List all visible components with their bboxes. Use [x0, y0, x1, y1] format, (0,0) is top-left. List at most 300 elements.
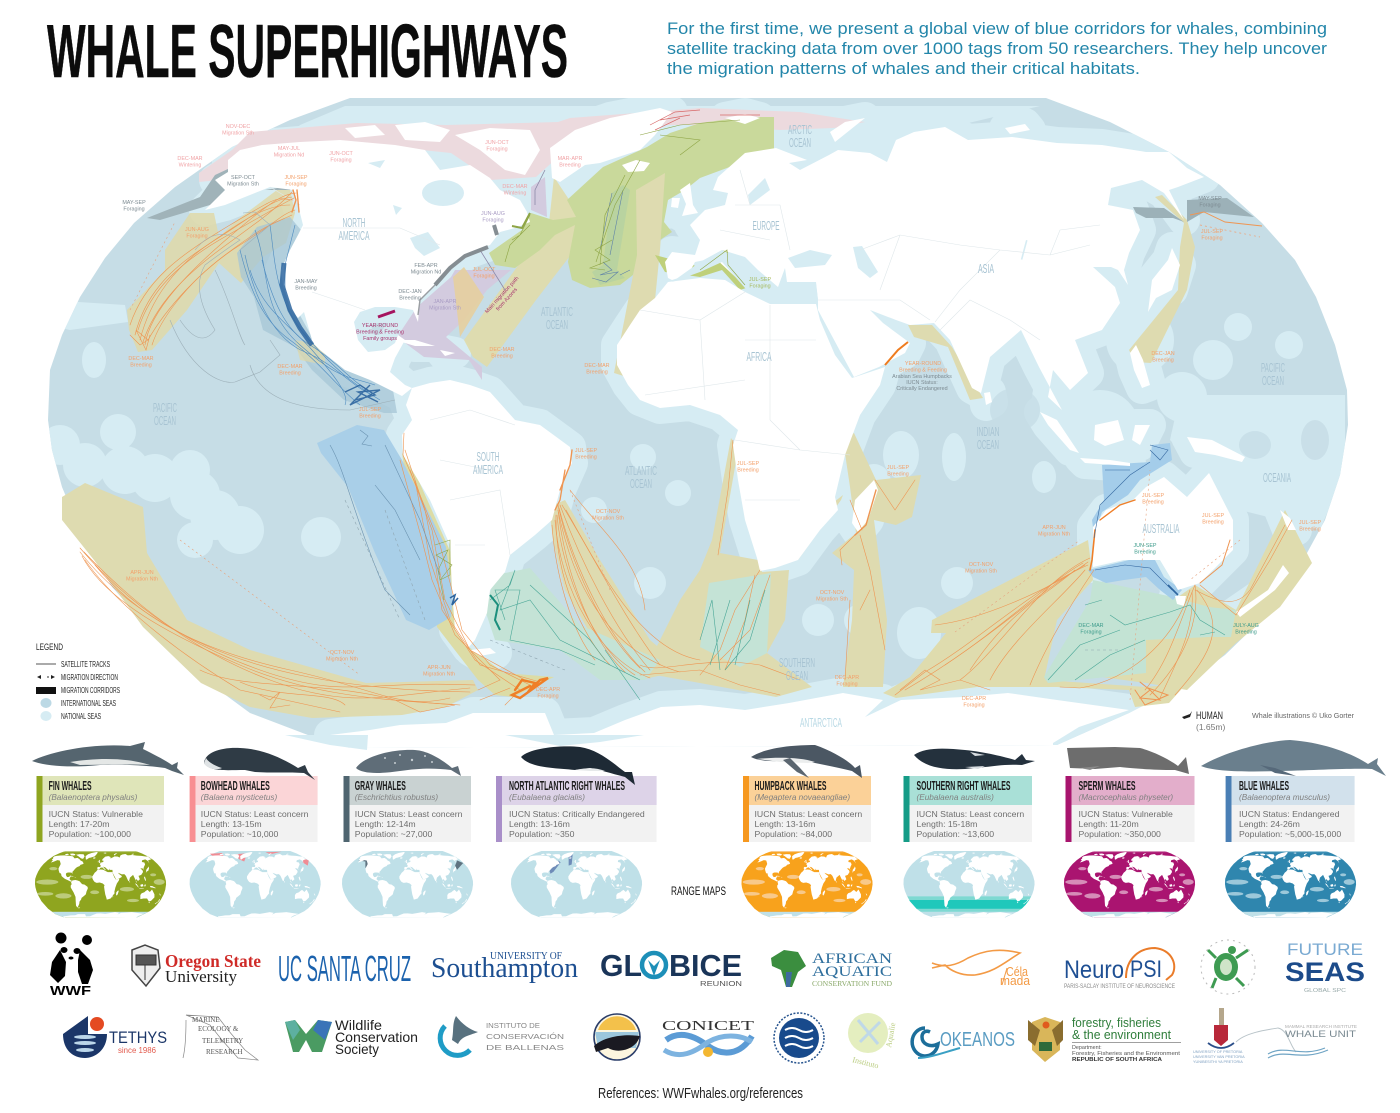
world map [40, 98, 1348, 765]
logo: NeuroPSI: Neuro [1064, 956, 1124, 984]
range map: bowhead [190, 851, 321, 920]
blue track cluster off Chile and Australia [450, 585, 1178, 605]
logo: Cetamada: Céla [1006, 964, 1029, 979]
logo: Tethys [63, 1016, 167, 1058]
logo: Marine Ecology and Telemetry Research: ECOLOGY & [198, 1025, 239, 1033]
geographic labels: AMERICA [338, 228, 370, 243]
logo: Forestry Fisheries and the Environment: REPUBLIC OF SOUTH AFRICA [1072, 1057, 1162, 1063]
species card: gray whales: Population: ~27,000 [355, 829, 432, 839]
seasonal labels: Migration Nth [126, 576, 158, 582]
species card: fin whales: FIN WHALES [49, 778, 92, 793]
seasonal labels: JUN-AUG [481, 211, 505, 217]
seasonal labels: JUN-AUG [185, 227, 209, 233]
seasonal labels: MAY-SEP [122, 200, 146, 206]
species card: sperm whales [1066, 776, 1194, 842]
whale: humpback [751, 745, 862, 778]
species card: fin whales: Length: 17-20m [49, 819, 109, 829]
species card: north atlantic right whales: IUCN Status: Critically Endangered [509, 809, 645, 819]
logo: Tethys: TETHYS [109, 1028, 167, 1047]
seasonal labels [122, 124, 1321, 708]
geographic labels: ASIA [978, 261, 994, 276]
legend: migration corridors: MIGRATION CORRIDORS [61, 686, 120, 695]
geographic labels: NORTH [342, 215, 366, 230]
seasonal labels: MAY-JUL [278, 146, 300, 152]
seasonal labels: Breeding & Feeding [899, 368, 947, 374]
whale: bowhead [204, 748, 315, 780]
logo: Wildlife Conservation Society: Society [335, 1041, 379, 1057]
logo: University of Pretoria: UNIVERSITY VAN PRETORIA [1193, 1055, 1245, 1059]
seasonal labels: OCT-NOV [969, 562, 993, 568]
whale: blue [1201, 740, 1386, 776]
seasonal labels: Foraging [963, 702, 985, 708]
migration corridors [62, 108, 1312, 718]
seasonal labels: Foraging [482, 218, 504, 224]
species card: blue whales: IUCN Status: Endangered [1239, 809, 1340, 819]
seasonal labels: APR-JUN [427, 665, 451, 671]
logo: Cetamada [932, 950, 1031, 988]
seasonal labels: JUL-SEP [359, 407, 381, 413]
legend: satellite tracks: SATELLITE TRACKS [61, 660, 110, 669]
logo: Marine Ecology and Telemetry Research: RESEARCH [206, 1048, 243, 1056]
corridor: South Pacific [62, 483, 478, 718]
seasonal labels: DEC-MAR [1078, 623, 1104, 629]
geographic labels: AUSTRALIA [1142, 521, 1180, 536]
corridor: southern right whales Atlantic [485, 568, 771, 680]
human scale: HUMAN [1196, 710, 1223, 722]
logo: Cetamada: mada [1000, 973, 1031, 988]
seasonal labels: JUL-SEP [737, 461, 759, 467]
range map: gray [342, 851, 473, 920]
human scale: (1.65m) [1196, 722, 1225, 732]
legend: LEGEND [36, 642, 63, 653]
species card: southern right whales: Length: 15-18m [916, 819, 977, 829]
geographic labels: OCEAN [1262, 373, 1284, 388]
dense blue track cluster off Central America [345, 385, 380, 405]
species card: gray whales: (Eschrichtius robustus) [355, 793, 438, 802]
seasonal labels: Migration Sth [429, 306, 461, 312]
seasonal labels: Foraging [836, 682, 858, 688]
national seas [40, 106, 1345, 765]
logo: Tethys: since 1986 [118, 1046, 157, 1055]
logo: Environment Society of Oman turtle [1201, 940, 1255, 994]
seasonal labels: NOV-DEC [226, 124, 250, 130]
logo: Oregon State University: Oregon State [165, 951, 261, 971]
geographic labels: SOUTH [476, 449, 500, 464]
corridor: Arabian Sea [908, 325, 983, 400]
logo: University of Pretoria [1193, 1008, 1245, 1064]
seasonal labels: Wintering [504, 190, 526, 196]
seasonal labels: Foraging [1201, 236, 1223, 242]
corridor: E Atlantic [614, 173, 665, 378]
species card: humpback whales: (Megaptera novaeangliae) [754, 793, 850, 802]
seasonal labels: Wintering [179, 162, 201, 168]
seasonal labels: JUL-SEP [1142, 493, 1164, 499]
seasonal labels: APR-JUN [130, 570, 154, 576]
corridor: NW Atlantic humpback [464, 177, 580, 367]
corridor: fin whale core band [592, 185, 630, 285]
logo: NeuroPSI: PARIS-SACLAY INSTITUTE OF NEUROSCIENCE [1064, 984, 1175, 990]
land masses [205, 108, 1296, 765]
seasonal labels: Foraging [1080, 630, 1102, 636]
seasonal labels: JAN-MAY [294, 279, 318, 285]
seasonal labels: JUN-SEP [284, 175, 308, 181]
whale: fin [32, 742, 184, 775]
logo: Wildlife Conservation Society: Wildlife [335, 1017, 382, 1033]
seasonal labels: Breeding [1152, 358, 1174, 364]
species card: blue whales: Length: 24-26m [1239, 819, 1300, 829]
corridor: SE Pacific blue whales [317, 425, 453, 630]
seasonal labels: JUL-SEP [749, 277, 771, 283]
logo: African Aquatic Conservation Fund: CONSERVATION FUND [812, 980, 892, 988]
logo: Instituto de Conservacion de Ballenas: CONSERVACIÓN [486, 1032, 564, 1041]
seasonal labels: Migration Nth [423, 672, 455, 678]
text: UC SANTA CRUZ [278, 948, 411, 989]
whale: southern right [914, 749, 1035, 769]
species card: north atlantic right whales: Population: ~350 [509, 829, 575, 839]
logo: Oregon State University: University [165, 967, 237, 986]
species card: southern right whales [904, 776, 1032, 842]
geographic labels: AFRICA [746, 349, 772, 364]
species card: sperm whales: (Macrocephalus physeter) [1078, 793, 1173, 802]
seasonal labels: DEC-MAR [277, 364, 303, 370]
logo: southern right whale round badge [594, 1014, 640, 1060]
seasonal labels: Breeding [1142, 500, 1164, 506]
seasonal labels: JUL-OCT [473, 267, 495, 273]
species card: southern right whales: IUCN Status: Least concern [916, 809, 1024, 819]
seasonal labels: DEC-MAR [584, 363, 610, 369]
geographic labels: AMERICA [473, 462, 503, 477]
corridor: bowhead [199, 108, 865, 182]
corridor: Mexico tail [295, 340, 325, 365]
logo: Instituto de Conservacion de Ballenas: DE BALLENAS [486, 1043, 564, 1052]
ocean base [48, 98, 1348, 748]
whale: sperm [1067, 747, 1189, 774]
logo: Forestry Fisheries and the Environment: forestry, fisheries [1072, 1015, 1161, 1030]
seasonal labels: JUL-SEP [887, 465, 909, 471]
seasonal labels: Foraging [473, 274, 495, 280]
tracks: other species [130, 110, 1262, 700]
world map: OCEANIA [1263, 470, 1291, 485]
seasonal labels: YEAR-ROUND [362, 323, 398, 329]
corridor: Pacific gray whales [237, 217, 397, 413]
geographic labels: OCEAN [977, 437, 999, 452]
seasonal labels: from Azores [495, 287, 519, 312]
seasonal labels: Migration Nd [411, 270, 441, 276]
corridor: Madagascar [798, 433, 921, 687]
species card: blue whales: BLUE WHALES [1239, 778, 1289, 793]
logo: Instituto de Conservacion de Ballenas [440, 1016, 564, 1055]
species card: north atlantic right whales: (Eubalaena glacialis) [509, 793, 585, 802]
species card: sperm whales: Length: 11-20m [1078, 819, 1139, 829]
species card: north atlantic right whales: NORTH ATLANTIC RIGHT WHALES [509, 778, 625, 793]
seasonal labels: Breeding [1202, 520, 1224, 526]
logo: Okeanos: OKEANOS [940, 1029, 1015, 1051]
sea fragments below Antarctica [285, 735, 644, 750]
logo: Instituto Aqualie [848, 1013, 897, 1070]
seasonal labels: Main migration path [484, 276, 520, 315]
seasonal labels: Migration Sth [816, 596, 848, 602]
seasonal labels: JAN-APR [433, 299, 457, 305]
logo: Globice [600, 948, 742, 988]
species card: bowhead whales: Length: 13-15m [201, 819, 262, 829]
legend: national seas: NATIONAL SEAS [61, 712, 101, 721]
legend [36, 642, 120, 721]
seasonal labels: DEC-APR [962, 696, 986, 702]
logo: University of Pretoria: UNIVERSITY OF PRETORIA [1193, 1050, 1243, 1054]
seasonal labels: Breeding [491, 354, 513, 360]
logo: Marine Ecology and Telemetry Research: TELEMETRY [202, 1037, 243, 1045]
seasonal labels: DEC-MAR [177, 156, 203, 162]
seasonal labels: Breeding [295, 286, 317, 292]
species card: gray whales: GRAY WHALES [355, 778, 406, 793]
species card: bowhead whales [190, 776, 318, 842]
tracks: gray whales in Pacific [170, 212, 395, 410]
corridor: SE Australia [1041, 510, 1312, 690]
species card: sperm whales: Population: ~350,000 [1078, 829, 1161, 839]
logo: African Aquatic Conservation Fund: AQUATIC [812, 964, 892, 980]
seasonal labels: Foraging [1199, 202, 1221, 208]
seasonal labels: JUL-SEP [575, 448, 597, 454]
species card: bowhead whales: Population: ~10,000 [201, 829, 278, 839]
human scale [1182, 710, 1225, 732]
legend: international seas: INTERNATIONAL SEAS [61, 699, 116, 708]
seasonal labels: YEAR-ROUND [905, 361, 941, 367]
logo: Future Seas [1285, 940, 1365, 994]
geographic labels: EUROPE [752, 218, 780, 233]
seasonal labels: DEC-APR [536, 687, 560, 693]
logo: Future Seas: GLOBAL SPC [1304, 988, 1346, 994]
corridor: South Atlantic [650, 438, 812, 697]
logo: African Aquatic Conservation Fund: AFRICAN [812, 951, 892, 967]
corridor: Australia blue whales [1088, 443, 1182, 600]
seasonal labels: JUN-OCT [485, 140, 509, 146]
intro text: the migration patterns of whales and their critical habitats. [667, 59, 1140, 78]
seasonal labels: Breeding & Feeding [356, 330, 404, 336]
seasonal labels: DEC-APR [835, 675, 859, 681]
seasonal labels: IUCN Status: [906, 380, 938, 386]
logo: African Aquatic Conservation Fund [771, 950, 892, 988]
satellite tracks: humpback [80, 190, 1292, 712]
range map: sperm [1063, 851, 1196, 920]
logo: Conicet: CONICET [662, 1019, 755, 1034]
logo: Escuela Superior de Ciencias Marinas [774, 1013, 824, 1063]
species card: humpback whales: Population: ~84,000 [754, 829, 832, 839]
logo: Forestry Fisheries and the Environment: Forestry, Fisheries and the Environment [1072, 1051, 1181, 1057]
range map: humpback [741, 851, 874, 920]
logo: Instituto Aqualie: Instituto [852, 1055, 880, 1070]
species card: gray whales: Length: 12-14m [355, 819, 416, 829]
seasonal labels: Breeding [737, 468, 759, 474]
legend: migration direction: MIGRATION DIRECTION [61, 673, 118, 682]
corridor: N Atlantic right whale [397, 270, 511, 380]
seasonal labels: Migration Sth [222, 130, 254, 136]
range maps label: RANGE MAPS [671, 884, 726, 898]
species card: bowhead whales: BOWHEAD WHALES [201, 778, 270, 793]
country borders [270, 170, 1100, 555]
seasonal labels: JUL-SEP [1201, 229, 1223, 235]
logo: Forestry Fisheries and the Environment: Department: [1072, 1045, 1102, 1051]
corridor: Brazil humpback [549, 500, 685, 680]
species card: humpback whales [743, 776, 871, 842]
corridor: Alaska gray whales [147, 155, 295, 220]
illustration credit: Whale illustrations © Uko Gorter [1252, 711, 1355, 720]
logo: Wildlife Conservation Society: Conservation [335, 1029, 418, 1045]
seasonal labels: Breeding [559, 162, 581, 168]
seasonal labels: Breeding [130, 362, 152, 368]
seasonal labels: MAY-SEP [1198, 196, 1222, 202]
logo: Wildlife Conservation Society [285, 1017, 418, 1057]
range map: fin [34, 851, 167, 920]
geographic labels: SOUTHERN [779, 655, 815, 670]
logo: Instituto de Conservacion de Ballenas: INSTITUTO DE [486, 1021, 540, 1030]
seasonal labels: Critically Endangered [896, 386, 948, 392]
logo: Globice: BICE [669, 948, 742, 983]
seasonal labels: Breeding [399, 296, 421, 302]
seasonal labels: Migration Sth [227, 182, 259, 188]
intro text: satellite tracking data from over 1000 tags from 50 researchers. They help uncover [667, 39, 1327, 58]
species card: bowhead whales: (Balaena mysticetus) [201, 793, 278, 802]
seasonal labels: Breeding [586, 370, 608, 376]
tracks: blue whales [240, 190, 1172, 615]
species card: blue whales [1226, 776, 1355, 842]
seasonal labels: Breeding [1235, 630, 1257, 636]
seasonal labels: Breeding [887, 472, 909, 478]
logo: Instituto Aqualie: Aqualie [884, 1021, 897, 1048]
species card: fin whales: (Balaenoptera physalus) [49, 793, 138, 802]
seasonal labels: OCT-NOV [820, 590, 844, 596]
logo: WWF [50, 932, 93, 998]
seasonal labels: Foraging [486, 146, 508, 152]
seasonal labels: Foraging [186, 234, 208, 240]
species card: bowhead whales: IUCN Status: Least concern [201, 809, 309, 819]
corridor: Okhotsk gray whales [1133, 198, 1254, 222]
title: WHALE SUPERHIGHWAYS [47, 9, 568, 93]
intro text [667, 19, 1327, 78]
seasonal labels: Breeding [1134, 550, 1156, 556]
corridor: Asia [1129, 195, 1195, 363]
seasonal labels: Breeding [279, 370, 301, 376]
dense blue track strip on Pacific coast [282, 263, 312, 345]
logo: University of Pretoria: YUNIBESITHI YA PRETORIA [1193, 1060, 1243, 1064]
species card: fin whales: Population: ~100,000 [49, 829, 131, 839]
seasonal labels: Migration Sth [592, 516, 624, 522]
logo: Whale Unit [1236, 1024, 1357, 1058]
seasonal labels: JULY-AUG [1233, 623, 1259, 629]
logo: Globice: REUNION [700, 981, 742, 988]
geographic labels [153, 122, 1291, 730]
species card: blue whales: Population: ~5,000-15,000 [1239, 829, 1341, 839]
geographic labels: PACIFIC [1261, 360, 1285, 375]
seasonal labels: Foraging [330, 158, 352, 164]
seasonal labels: OCT-NOV [330, 650, 354, 656]
geographic labels: OCEAN [630, 476, 652, 491]
geographic labels: ATLANTIC [541, 304, 573, 319]
geographic labels: OCEAN [154, 413, 176, 428]
logo: Forestry Fisheries and the Environment: & the environment [1072, 1027, 1171, 1042]
species card: gray whales: IUCN Status: Least concern [355, 809, 463, 819]
seasonal labels: OCT-NOV [596, 509, 620, 515]
seasonal labels: JUN-OCT [329, 151, 353, 157]
seasonal labels: Breeding [575, 454, 597, 460]
seasonal labels: DEC-MAR [502, 184, 528, 190]
seasonal labels: Arabian Sea Humpbacks [892, 374, 952, 380]
species card: sperm whales: IUCN Status: Vulnerable [1078, 809, 1173, 819]
logo: University of Southampton: UNIVERSITY OF [490, 951, 562, 962]
geographic labels: ARCTIC [788, 122, 812, 137]
corridor: southern right whales Indian [1044, 580, 1236, 683]
species card: humpback whales: IUCN Status: Least concern [754, 809, 862, 819]
logo: Whale Unit: WHALE UNIT [1285, 1029, 1357, 1039]
seasonal labels: Migration Nth [326, 656, 358, 662]
species card: fin whales [36, 776, 164, 842]
whale: north atlantic right [521, 746, 635, 785]
seasonal labels: Foraging [123, 206, 145, 212]
species card: blue whales: (Balaenoptera musculus) [1239, 793, 1330, 802]
species card: sperm whales: SPERM WHALES [1078, 778, 1136, 793]
logo: University of Southampton: Southampton [431, 953, 578, 984]
corridor: N Pacific humpback [127, 190, 295, 352]
seasonal labels: Migration Nth [1038, 532, 1070, 538]
darker patches on Pacific [990, 388, 1329, 460]
seasonal labels: JUL-SEP [1202, 513, 1224, 519]
logo: Marine Ecology and Telemetry Research [183, 1015, 258, 1060]
geographic labels: INDIAN [976, 424, 1000, 439]
seasonal labels: DEC-MAR [128, 356, 154, 362]
seasonal labels: FEB-APR [414, 263, 438, 269]
seasonal labels: DEC-JAN [1151, 351, 1175, 357]
corridor: Mediterranean fin whales [655, 248, 749, 290]
logo: Forestry Fisheries and the Environment [1028, 1015, 1181, 1063]
seasonal labels: MAR-APR [558, 156, 582, 162]
geographic labels: ANTARCTICA [800, 715, 842, 730]
seasonal labels: Migration Sth [965, 568, 997, 574]
species card: fin whales: IUCN Status: Vulnerable [49, 809, 143, 819]
geographic labels: OCEAN [786, 668, 808, 683]
intro text: For the first time, we present a global view of blue corridors for whales, combining [667, 19, 1327, 38]
seasonal labels: APR-JUN [1042, 525, 1066, 531]
geographic labels: ATLANTIC [625, 463, 657, 478]
logo: WWF: WWF [50, 983, 91, 998]
species card: southern right whales: (Eubalaena australis) [916, 793, 994, 802]
seasonal labels: Breeding [359, 414, 381, 420]
whale: gray [356, 750, 461, 776]
lakes and inland seas [368, 160, 1028, 300]
logo: Conicet [662, 1019, 755, 1057]
species card: north atlantic right whales: Length: 13-16m [509, 819, 570, 829]
range map: north atlantic right [511, 851, 642, 920]
logo: NeuroPSI: PSI [1130, 956, 1162, 983]
seasonal labels: Foraging [537, 694, 559, 700]
geographic labels: OCEAN [789, 135, 811, 150]
seasonal labels: JUL-SEP [1299, 520, 1321, 526]
seasonal labels: Foraging [749, 284, 771, 290]
corridor: Indian Ocean [883, 540, 1187, 707]
logo: Okeanos [912, 1028, 1015, 1058]
seasonal labels: DEC-JAN [398, 289, 422, 295]
tracks: southern right whales [490, 570, 1225, 700]
geographic labels: OCEAN [546, 317, 568, 332]
logo: NeuroPSI [1064, 948, 1175, 990]
geographic labels: PACIFIC [153, 400, 177, 415]
seasonal labels: DEC-MAR [489, 347, 515, 353]
species card: humpback whales: HUMPBACK WHALES [754, 778, 827, 793]
logo: Oregon State University [132, 945, 261, 986]
species card: humpback whales: Length: 13-16m [754, 819, 815, 829]
tracks: fin whales [435, 120, 745, 600]
seasonal labels: JUN-SEP [1133, 543, 1157, 549]
logo: Whale Unit: MAMMAL RESEARCH INSTITUTE [1285, 1024, 1357, 1029]
species card: southern right whales: SOUTHERN RIGHT WHALES [916, 778, 1011, 793]
